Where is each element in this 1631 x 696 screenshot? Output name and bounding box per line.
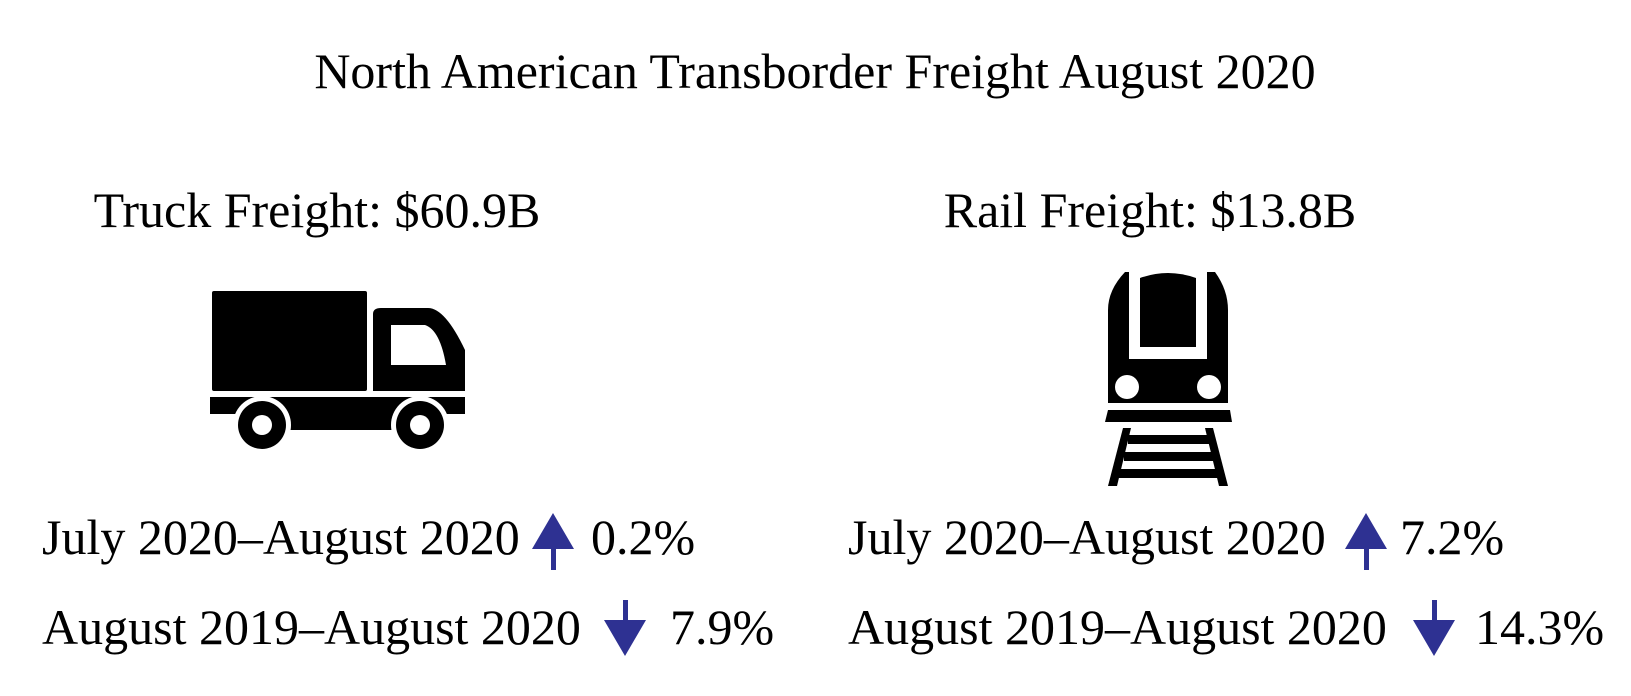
icon: truck — [210, 291, 465, 454]
stat: rail year: 14.3% — [1475, 599, 1604, 655]
panel: truck — [42, 182, 774, 656]
stat: rail month: 7.2% — [1400, 509, 1504, 565]
stat: truck year: 7.9% — [670, 599, 774, 655]
icon: up arrow — [1345, 513, 1387, 570]
stat: truck month: July 2020–August 2020 — [42, 509, 520, 565]
stat: truck month — [42, 509, 695, 570]
heading: rail freight: Rail Freight: $13.8B — [944, 182, 1356, 238]
icon: train — [1105, 272, 1232, 486]
icon: down arrow — [1413, 600, 1455, 656]
stat: truck year: August 2019–August 2020 — [42, 599, 581, 655]
stat: rail month: July 2020–August 2020 — [848, 509, 1326, 565]
stat: rail year: August 2019–August 2020 — [848, 599, 1387, 655]
icon: down arrow — [604, 600, 646, 656]
heading: truck freight: Truck Freight: $60.9B — [94, 182, 540, 238]
icon: up arrow — [532, 513, 574, 570]
panel: rail — [848, 182, 1604, 656]
stat: truck month: 0.2% — [591, 509, 695, 565]
stat: rail month — [848, 509, 1504, 570]
title: North American Transborder Freight August 2020 — [314, 43, 1316, 99]
